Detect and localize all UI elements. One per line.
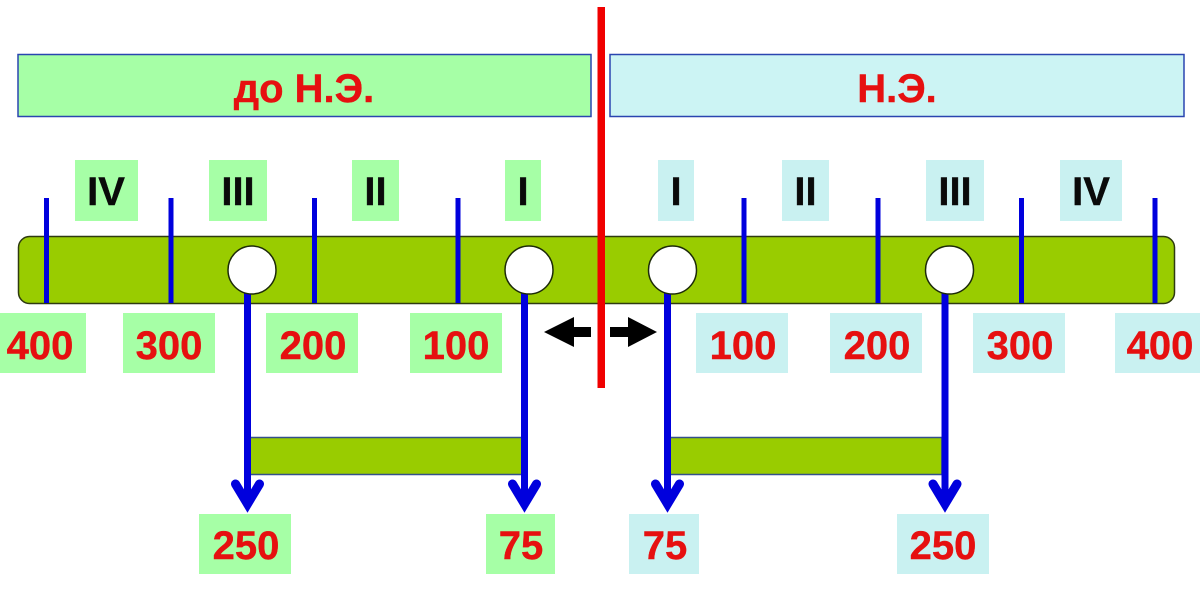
year label: 100 AD [696,313,788,373]
century label: III AD: III [938,170,972,214]
year label: 100 BC: 100 [423,324,489,368]
marker: 75 BC [505,246,553,294]
century label: IV AD [1060,160,1122,221]
year label: 300 AD: 300 [987,324,1053,368]
panel: BC header: до Н.Э. [234,67,374,111]
marker: 250 AD [926,246,974,294]
century label: III AD [926,160,984,221]
year label: 400 BC [0,313,86,373]
century label: IV BC: IV [87,170,125,214]
year label: 200 BC [266,313,358,373]
century label: I AD: I [670,170,682,214]
year label: 250 BC [199,514,291,574]
century label: II BC [352,160,399,221]
year label: 400 AD [1115,313,1200,373]
century label: II BC: II [364,170,387,214]
year label: 75 BC [486,514,555,574]
year label: 300 BC [123,313,215,373]
arrow: pointing left [544,317,591,347]
arrow: 250 AD [933,293,957,504]
year label: 250 BC: 250 [213,524,279,568]
year label: 200 BC: 200 [280,324,346,368]
year label: 400 AD: 400 [1127,324,1193,368]
century label: I AD [658,160,694,221]
century label: IV BC [75,160,138,221]
panel: AD header [610,54,1184,116]
year label: 200 AD: 200 [844,324,910,368]
century label: II AD: II [794,170,817,214]
century label: III BC: III [221,170,255,214]
span bar: AD [670,438,942,474]
marker: 75 AD [648,246,696,294]
arrow: 75 BC [512,293,536,504]
year label: 75 AD [629,514,699,574]
panel: AD header: Н.Э. [857,67,937,111]
century label: IV AD: IV [1072,170,1110,214]
year label: 100 AD: 100 [710,324,776,368]
span bar: BC [250,438,522,474]
year label: 75 AD: 75 [643,524,687,568]
century label: I BC [505,160,541,221]
year label: 300 AD [973,313,1065,373]
century label: III BC [209,160,267,221]
year label: 200 AD [830,313,922,373]
era divider line [598,7,605,388]
year label: 250 AD [897,514,989,574]
timeline bar [18,236,1174,304]
year label: 100 BC [410,313,502,373]
year label: 75 BC: 75 [499,524,543,568]
tick marks [44,198,1158,303]
year label: 400 BC: 400 [7,324,73,368]
year label: 250 AD: 250 [910,524,976,568]
panel: BC header [18,54,591,116]
year label: 300 BC: 300 [136,324,202,368]
century label: II AD [782,160,829,221]
arrow: 250 BC [236,293,260,504]
century label: I BC: I [517,170,529,214]
marker: 250 BC [228,246,276,294]
arrow: 75 AD [656,293,680,504]
arrow: pointing right [610,317,657,347]
